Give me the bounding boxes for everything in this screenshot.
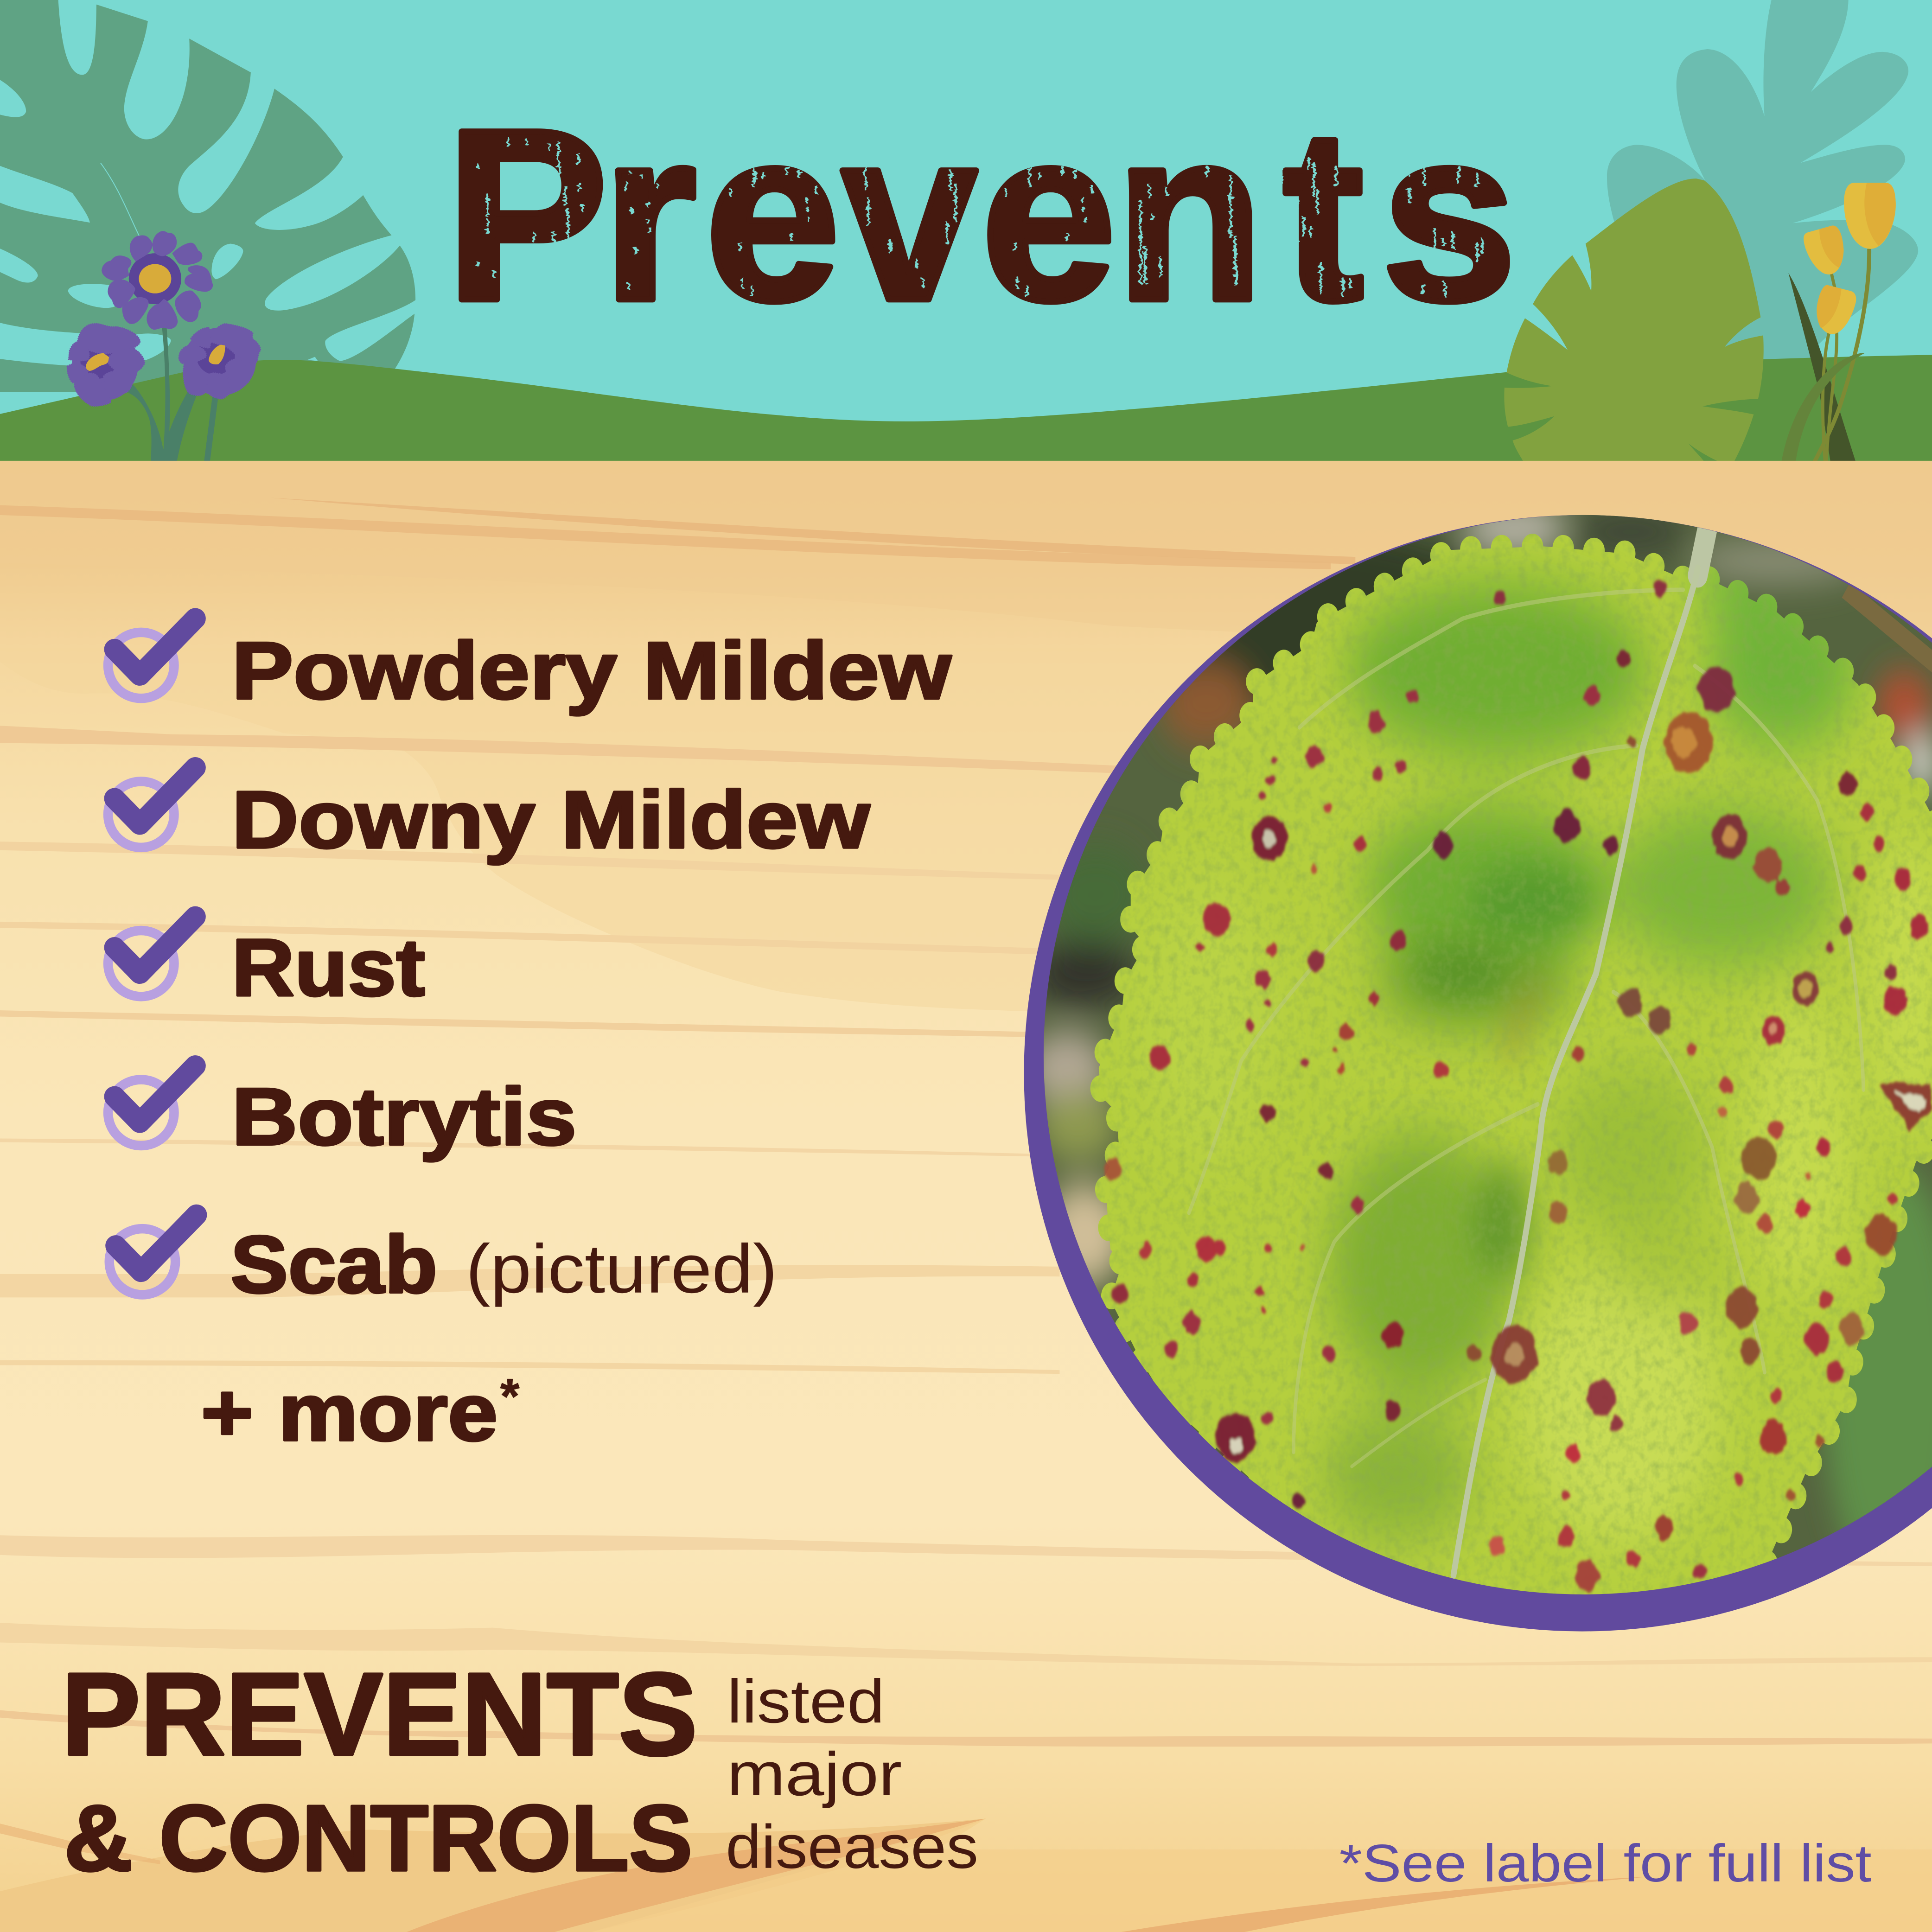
tulip top bbox=[1844, 183, 1896, 249]
item: Rust: Rust bbox=[232, 922, 425, 1013]
photo: diseased leaf in purple circle bbox=[1020, 503, 1932, 1669]
title distress marks (right) bbox=[1006, 138, 1482, 297]
item: Scab (pictured): Scab bbox=[230, 1219, 437, 1310]
item: + more: * bbox=[500, 1369, 520, 1424]
flower: small right bbox=[179, 324, 261, 399]
flower centre bbox=[209, 344, 225, 364]
bottom statement bbox=[62, 1649, 978, 1890]
item: Powdery Mildew bbox=[108, 618, 951, 716]
item: Powdery Mildew: Powdery Mildew bbox=[232, 625, 951, 716]
item: Downy Mildew bbox=[108, 768, 870, 865]
green banana leaf bbox=[1504, 179, 1764, 461]
plant: green leaf and tulips bbox=[1504, 179, 1896, 461]
purple ring bbox=[1024, 515, 1932, 1632]
leaf body bbox=[1020, 510, 1932, 1669]
item: Scab (pictured) bbox=[109, 1215, 778, 1310]
item: Scab (pictured): (pictured) bbox=[466, 1230, 778, 1307]
leaf veins bbox=[1189, 524, 1863, 1575]
item: Botrytis: Botrytis bbox=[232, 1071, 577, 1162]
sky background bbox=[0, 0, 1932, 462]
purple flower cluster bbox=[67, 232, 261, 406]
item: Botrytis bbox=[108, 1066, 577, 1162]
disease spots bbox=[1103, 578, 1932, 1593]
bottom statement: listed bbox=[727, 1667, 885, 1736]
item: + more: + more bbox=[201, 1367, 498, 1458]
title: Prevents: Prevents bbox=[446, 79, 1517, 351]
footnote: *See label for full list bbox=[1339, 1834, 1872, 1893]
dark grass blade bbox=[1788, 273, 1855, 461]
bottom statement: & CONTROLS bbox=[64, 1785, 693, 1890]
tulip lower bbox=[1817, 285, 1856, 334]
flower: large bbox=[102, 232, 212, 329]
title distress marks (left) bbox=[478, 138, 956, 296]
bottom statement: diseases bbox=[726, 1813, 978, 1881]
item: Rust bbox=[108, 917, 425, 1013]
ground hill bbox=[0, 355, 1932, 462]
icon: check bbox=[108, 917, 195, 996]
icon: check bbox=[108, 618, 195, 698]
icon: check bbox=[108, 768, 195, 848]
leaf texture bbox=[1020, 510, 1932, 1669]
item: Downy Mildew: Downy Mildew bbox=[232, 774, 870, 865]
checklist bbox=[108, 618, 951, 1458]
flower: small left bbox=[67, 324, 145, 406]
tulip middle bbox=[1804, 226, 1843, 274]
icon: check bbox=[109, 1215, 197, 1295]
curved grass blade bbox=[1781, 353, 1865, 461]
flower stems bbox=[127, 324, 218, 461]
flower centre bbox=[139, 264, 171, 293]
bottom statement: major bbox=[727, 1740, 902, 1809]
flower centre bbox=[86, 353, 109, 371]
icon: check bbox=[108, 1066, 195, 1146]
tulip stems bbox=[1815, 249, 1869, 461]
plant: teal background leaf bbox=[1607, 0, 1918, 374]
wood panel background bbox=[0, 461, 1932, 1932]
bottom statement: PREVENTS bbox=[62, 1649, 697, 1779]
plant: monstera leaf bbox=[0, 0, 415, 416]
photo background bbox=[1020, 503, 1932, 1646]
